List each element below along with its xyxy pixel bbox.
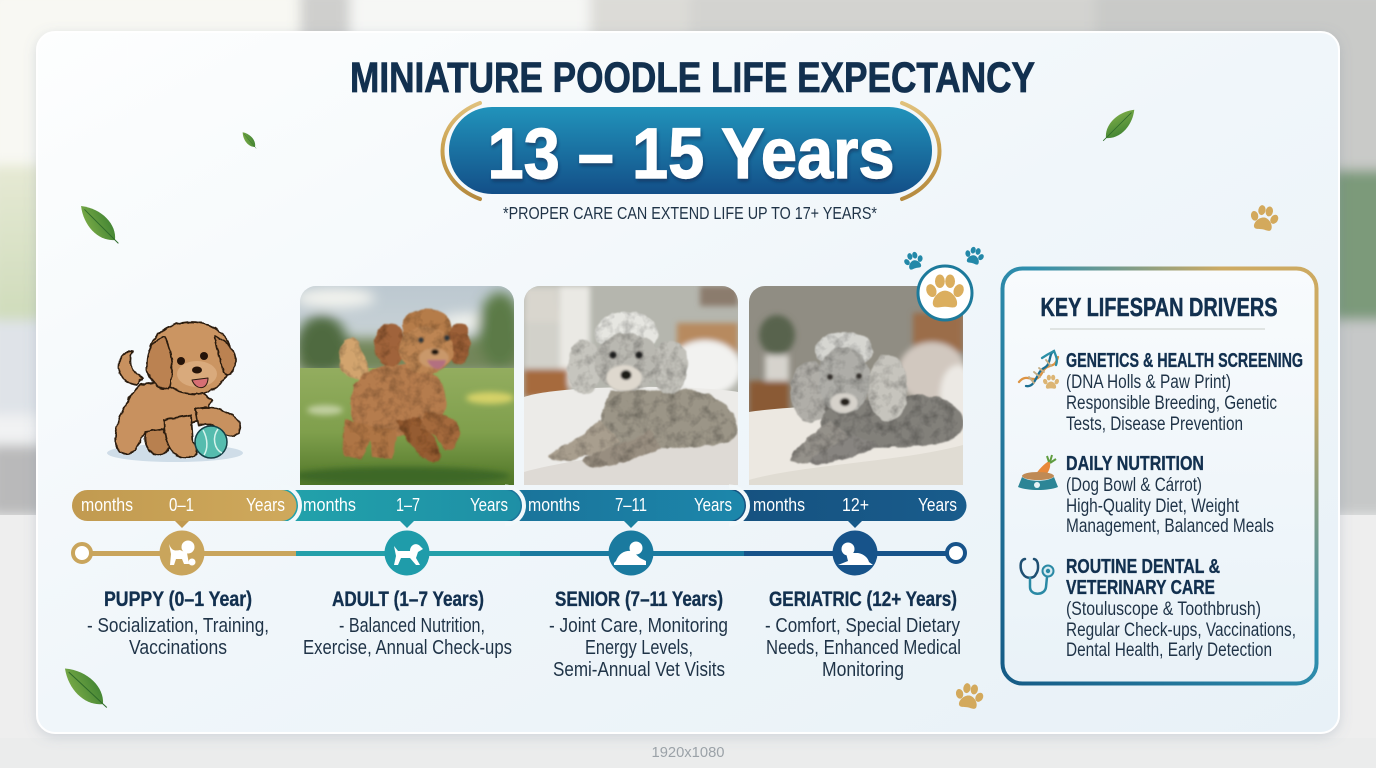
stage bar: senior: 7–11 — [615, 494, 647, 515]
photo: geriatric poodle on bed — [749, 286, 976, 485]
stage text: geriatric: Needs, Enhanced Medical — [766, 637, 961, 659]
nutrition text: High-Quality Diet, Weight — [1066, 496, 1240, 517]
stage text: senior: Energy Levels, — [585, 637, 693, 659]
stage bar: geriatric — [720, 490, 966, 528]
puppy illustration — [107, 322, 243, 462]
dental care text — [1066, 556, 1296, 661]
stage text: puppy: - Socialization, Training, — [87, 615, 269, 637]
title: MINIATURE POODLE LIFE EXPECTANCY — [350, 54, 1035, 102]
nutrition text: (Dog Bowl & Cárrot) — [1066, 475, 1202, 496]
decorative paw prints — [901, 203, 1281, 710]
stage text: senior: - Joint Care, Monitoring — [549, 615, 728, 637]
stage bar: puppy — [72, 486, 300, 528]
panel heading: KEY LIFESPAN DRIVERS — [1040, 292, 1278, 322]
stage text: geriatric: Monitoring — [822, 659, 904, 681]
stage bar: geriatric: 12+ — [842, 494, 869, 515]
stage text: senior: SENIOR (7–11 Years) — [555, 588, 723, 611]
decorative leaves — [58, 104, 1140, 715]
stage bar: puppy: Years — [246, 494, 285, 515]
icon: stethoscope — [1021, 559, 1054, 594]
icon: dog bowl and carrot — [1018, 455, 1058, 490]
stage text: geriatric — [765, 588, 961, 681]
stage bar: puppy: 0–1 — [169, 494, 194, 515]
stage text: puppy — [87, 588, 269, 659]
node: adult — [384, 530, 430, 576]
dental care text: ROUTINE DENTAL & — [1066, 556, 1220, 578]
genetics text: (DNA Holls & Paw Print) — [1066, 372, 1231, 393]
node: geriatric — [832, 530, 878, 576]
stage bar: adult: 1–7 — [396, 494, 420, 515]
dental care text: (Stouluscope & Toothbrush) — [1066, 599, 1261, 620]
icon: DNA and paw — [1019, 351, 1060, 389]
genetics text — [1066, 350, 1303, 435]
stage text: adult: - Balanced Nutrition, — [339, 615, 485, 637]
footer dimension label: 1920x1080 — [652, 745, 724, 761]
stage bar: senior — [500, 486, 748, 528]
timeline end ring — [947, 544, 965, 562]
stage bar: adult: Years — [470, 494, 508, 515]
stage bar: geriatric: Years — [918, 494, 957, 515]
stage text: geriatric: GERIATRIC (12+ Years) — [769, 588, 957, 611]
stage text: puppy: PUPPY (0–1 Year) — [104, 588, 252, 611]
node: senior — [608, 530, 654, 576]
stage text: adult: ADULT (1–7 Years) — [332, 588, 484, 611]
stage bar: senior: months — [528, 494, 580, 515]
stage bar: puppy: months — [81, 494, 133, 515]
genetics text: Responsible Breeding, Genetic — [1066, 393, 1277, 414]
nutrition text — [1066, 453, 1274, 537]
stage bar: adult — [272, 486, 524, 528]
subtitle note: *PROPER CARE CAN EXTEND LIFE UP TO 17+ YEARS* — [503, 203, 877, 223]
stage bar: senior: Years — [694, 494, 732, 515]
stage bar: adult: months — [303, 494, 356, 515]
paw badge — [918, 266, 972, 320]
stage text: adult: Exercise, Annual Check-ups — [303, 637, 512, 659]
genetics text: Tests, Disease Prevention — [1066, 414, 1243, 435]
stage text: senior: Semi-Annual Vet Visits — [553, 659, 725, 681]
stage bar: geriatric: months — [753, 494, 805, 515]
nutrition text: DAILY NUTRITION — [1066, 453, 1204, 475]
photo: senior poodle on bed — [524, 286, 741, 485]
stage text: geriatric: - Comfort, Special Dietary — [765, 615, 960, 637]
stage text: adult — [303, 588, 512, 659]
timeline — [73, 530, 965, 576]
node: puppy — [160, 530, 204, 576]
stage text: puppy: Vaccinations — [129, 637, 227, 659]
stage text: senior — [549, 588, 728, 681]
photo: adult poodle in meadow — [290, 286, 525, 485]
dental care text: Regular Check-ups, Vaccinations, — [1066, 620, 1296, 641]
timeline start ring — [73, 544, 91, 562]
nutrition text: Management, Balanced Meals — [1066, 516, 1274, 537]
dental care text: Dental Health, Early Detection — [1066, 640, 1272, 661]
dental care text: VETERINARY CARE — [1066, 577, 1215, 599]
panel: key lifespan drivers — [1002, 268, 1316, 684]
lifespan badge: 13 – 15 Years — [488, 115, 894, 194]
